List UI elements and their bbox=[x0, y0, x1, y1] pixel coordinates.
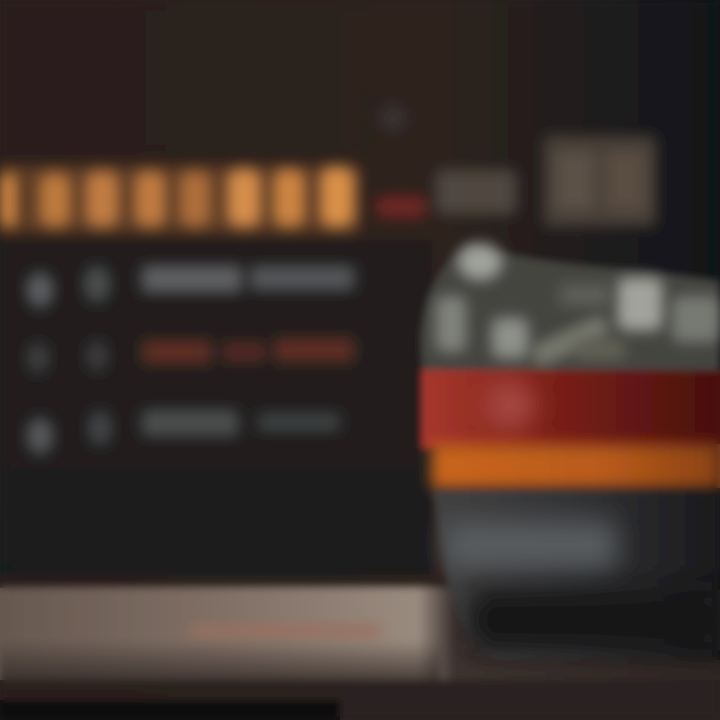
jar: banknote highlights bbox=[436, 244, 720, 368]
table row 2 bbox=[27, 338, 354, 373]
chart board panel bbox=[0, 240, 432, 575]
jar: dark lower body bbox=[434, 490, 720, 660]
table surface bbox=[0, 588, 720, 720]
jar: red band bbox=[422, 370, 720, 448]
jar: orange band bbox=[432, 444, 720, 488]
header row: red marker bbox=[376, 196, 426, 218]
header row: grey cells bbox=[379, 104, 656, 226]
jar: lower label highlight bbox=[446, 522, 616, 568]
table row 3 bbox=[27, 410, 340, 454]
table row 1 bbox=[27, 266, 354, 307]
header row: orange glowing cells bbox=[0, 166, 360, 232]
jar: banknotes base bbox=[421, 244, 720, 376]
jar of money bbox=[421, 244, 720, 660]
